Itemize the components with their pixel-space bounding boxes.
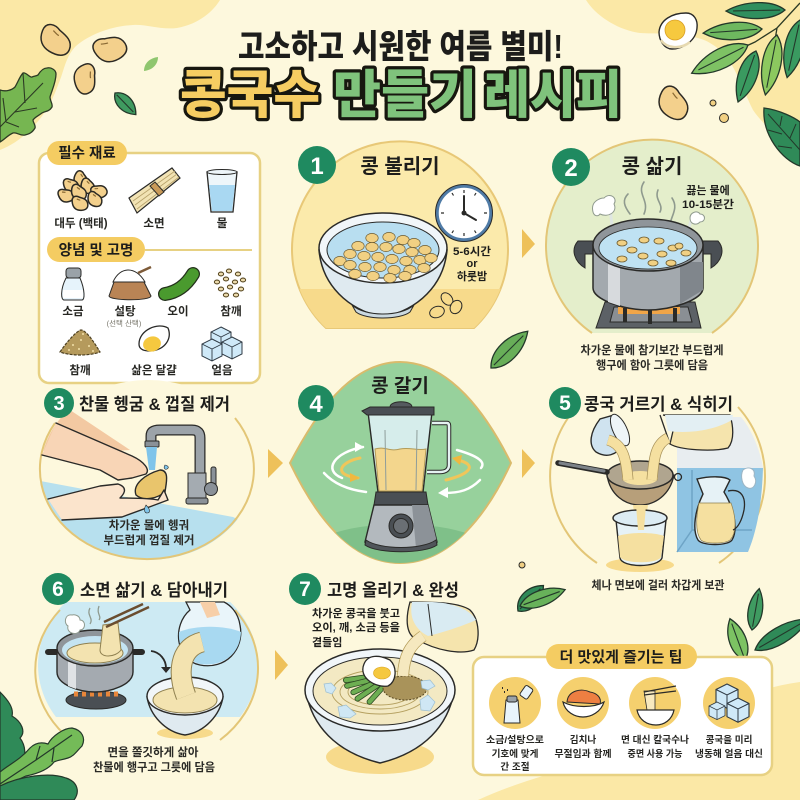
icon: fridge with pitcher [677,417,763,552]
icon: bowl of soaking beans [319,213,447,318]
step 6 caption: 찬물에 행구고 그릇에 담음 [93,760,215,774]
step 7 badge: 7 [299,578,311,601]
labels: essentials: 물 [217,217,228,230]
step 7 panel [289,573,478,774]
decoration: top-right egg [659,13,697,49]
tip captions: 김치나 [570,734,596,746]
step 2 title: 콩 삶기 [622,155,682,178]
tip captions: 면 대신 칼국수나 [621,734,689,746]
icon: soybeans [57,169,109,211]
icon: pot with noodles [48,623,142,709]
icon: noodles falling [181,642,202,696]
icon: loose beans [428,290,464,320]
panel: tips [473,644,772,775]
labels: essentials: 소면 [143,217,165,230]
icon: steam [610,182,692,230]
tip captions: 콩국을 미리 [706,735,752,746]
icon: steam [65,606,100,633]
step 2 caption: 행구에 함아 그릇에 담음 [596,358,708,372]
labels: seasoning row one: 소금 [62,305,84,318]
icon: pouring cup left [591,412,634,455]
step 6 title: 소면 삶기 & 담아내기 [80,581,228,600]
step 5 caption: 체나 면보에 걸러 차갑게 보관 [592,578,725,592]
labels: seasoning row two: 참깨 [69,363,91,377]
step 3 title: 찬물 헹굼 & 껍질 제거 [79,395,230,414]
step 6 badge [42,573,74,605]
labels: seasoning row one [62,304,242,328]
arrow: step 3 to 4 [268,449,283,478]
labels: seasoning row two [69,363,233,377]
step 4 title: 콩 갈기 [371,375,429,397]
decoration: leaves bottom-right [722,587,800,663]
tip captions [486,734,763,773]
decoration: top-left oak leaf [0,68,56,142]
icon: pouring broth [403,636,423,676]
tips heading: 더 맛있게 즐기는 팁 [560,649,682,666]
icon: salt [62,268,84,300]
decoration: right leaf [764,108,800,166]
step 3 panel [40,380,260,570]
icon: egg garnish [363,656,395,686]
step 2 caption [580,343,724,372]
step 7 instructions: 차가운 콩국을 붓고 [312,606,400,620]
tip captions: 냉동해 얼음 대신 [695,748,763,760]
arrow: step 6 to 7 [275,650,288,680]
ice pieces [324,680,435,718]
icon: steam puffs [593,196,704,224]
icon: pouring pitcher [407,602,478,652]
decoration: leaves centre-right [512,579,568,617]
step 7 instructions [312,606,400,649]
cucumber strips [343,674,387,705]
decoration: small ring [519,562,525,568]
icon: ice cubes [202,327,242,361]
icon: sugar bowl [109,267,151,300]
icon: somyeon noodles [129,168,180,213]
step 7 instructions: 곁들임 [312,636,342,649]
main title [180,67,622,125]
icon: lower hand [48,484,168,520]
decoration: bottom-left leaves [0,692,84,800]
icon: serving bowl [147,677,223,739]
step 5 panel [549,387,765,592]
icon: rotation arrows [324,447,482,493]
labels: seasoning row one: 오이 [167,305,189,318]
step 4 badge: 4 [309,391,323,418]
heading: essential ingredients [47,141,127,165]
sesame mound [383,676,427,700]
step 3 badge [44,388,74,418]
tips heading [546,644,697,669]
labels: seasoning row one: 참깨 [220,304,242,318]
icon: pot [574,219,722,310]
icon: tip kimchi [557,677,609,729]
text: boiling time: 10-15분간 [682,198,734,211]
icon: cucumber [165,274,193,294]
step 5 badge: 5 [559,392,571,415]
step 3 caption: 부드럽게 껍질 제거 [103,533,195,547]
labels: seasoning row two: 삶은 달걀 [131,363,177,377]
decoration: beans top-left [36,22,130,97]
heading: essential ingredients: 필수 재료 [58,145,116,162]
main title: 만들기 [333,67,477,125]
icon: sesame pile [60,330,100,355]
step 6 caption [93,745,215,774]
subtitle: 고소하고 시원한 여름 별미! [238,28,563,65]
icon: faucet [145,430,218,504]
main title: 콩국수 [180,67,320,125]
arrow: step 4 to 5 [522,449,535,478]
step 4 badge [298,385,334,421]
icon: strainer [558,461,682,525]
icon: tip noodles [629,677,681,729]
labels: essentials [54,216,228,230]
step 1 badge: 1 [310,153,324,180]
icon: water drops [144,465,168,513]
step 7 badge [289,573,321,605]
step 3 badge: 3 [53,393,65,415]
text: soaking time: or [466,258,478,270]
labels: essentials: 대두 (백태) [54,216,108,230]
labels: seasoning row two: 얼음 [211,363,233,377]
step 4 panel [289,361,512,564]
step 2 panel [546,140,758,372]
soaked beans [334,232,437,283]
icon: chopsticks [104,604,149,627]
step 6 panel [35,573,258,774]
tip captions: 간 조절 [500,761,530,773]
text: soaking time [453,245,491,283]
icon: pouring soy milk [608,438,668,480]
icon: upper hand [42,423,147,480]
icon: measuring cup [606,505,674,572]
step 6 caption: 면을 쫄깃하게 삶아 [107,745,199,759]
icon: sesame [214,269,246,297]
icon: tip ice [703,677,755,729]
step 2 badge [552,148,590,186]
text: soaking time: 5-6시간 [453,245,491,258]
panel: ingredients [39,141,260,383]
arrow: step 1 to 2 [522,229,535,258]
decoration: right bean and rings [653,83,728,123]
step 3 caption: 차가운 물에 헹궈 [109,518,189,532]
step 1 badge [298,146,336,184]
icon: bean being peeled [135,470,167,499]
icon: clock [436,184,492,242]
noodles swirl [332,670,428,714]
labels: seasoning row one: 설탕 [114,305,136,318]
step 3 caption [103,518,195,547]
icon: noodle bowl [305,649,455,774]
icon: stove burner [596,302,701,328]
icon: water stream [146,447,157,470]
icon: glass of water [207,170,237,212]
step 2 caption: 차가운 물에 참기보간 부드럽게 [580,343,724,357]
icon: pouring jug right [660,415,733,450]
text: boiling time [682,184,734,211]
icon: arrow heads [350,442,462,498]
decoration: leaf mid [484,325,534,374]
step 7 instructions: 오이, 깨, 소금 등을 [312,620,400,634]
icon: blender [362,402,449,552]
icon: water bowl pouring [179,602,241,666]
text: boiling time: 끓는 물에 [686,184,730,197]
icon: boiled egg [139,326,169,354]
tip captions: 기호에 맞게 [492,748,539,760]
step 7 title: 고명 올리기 & 완성 [327,581,459,600]
labels: seasoning row one: (선택 산택) [107,318,142,328]
tip captions: 무절임과 함께 [554,748,612,760]
step 5 badge [549,387,581,419]
tip captions: 중면 사용 가능 [628,748,683,760]
icon: flow arrow [151,651,171,673]
heading: seasoning and garnish: 양념 및 고명 [59,242,133,259]
icon: tip salt [489,677,541,729]
step 6 badge: 6 [52,578,64,601]
beans in boiling water [617,237,691,266]
tip captions: 소금/설탕으로 [486,734,544,746]
heading: seasoning and garnish [47,237,252,262]
step 1 panel [280,141,520,329]
decoration: small leaves top [110,57,158,119]
main title: 레시피 [484,67,622,125]
step 1 title: 콩 불리기 [360,155,440,178]
decoration: top-right branch leaves [687,2,800,105]
step 5 title: 콩국 거르기 & 식히기 [584,395,733,414]
text: soaking time: 하룻밤 [457,270,487,283]
step 2 badge: 2 [564,155,578,182]
